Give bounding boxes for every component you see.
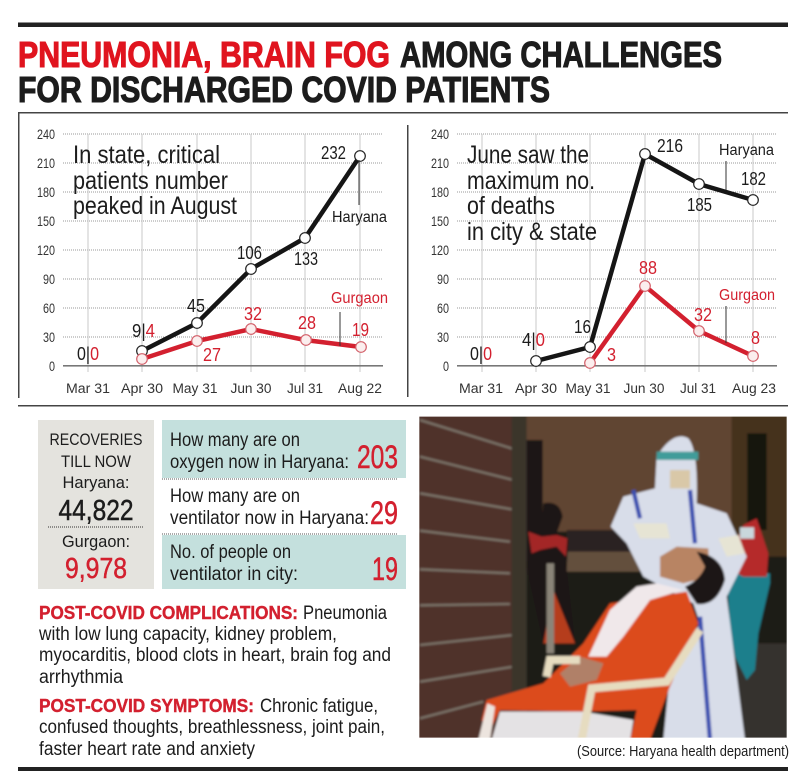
panel: recoveries: 44,822	[58, 495, 134, 527]
x axis labels: Jun 30	[624, 381, 664, 396]
text block: complications: POST-COVID COMPLICATIONS:	[39, 603, 298, 623]
value labels: 0|0	[77, 344, 99, 364]
y axis labels	[37, 127, 55, 374]
photo: bystander in red and black	[541, 502, 568, 572]
y axis labels: 90	[43, 272, 55, 287]
x axis labels: Mar 31	[66, 381, 110, 396]
value labels: 19	[352, 320, 369, 340]
y axis labels: 210	[431, 156, 449, 171]
value labels: 133	[294, 249, 318, 269]
markers	[531, 149, 758, 368]
value labels: 27	[203, 345, 221, 365]
title: FOR DISCHARGED COVID PATIENTS	[18, 69, 550, 110]
value labels: 0|0	[470, 344, 492, 364]
value labels: 106	[237, 243, 262, 263]
panel: ventilator in Haryana: ventilator now in Haryana:	[170, 508, 369, 529]
series label: Gurgaon: Gurgaon	[331, 290, 388, 307]
x axis labels: Apr 30	[121, 381, 163, 396]
panel: recoveries	[38, 420, 154, 589]
value labels: 4|0	[522, 330, 545, 350]
text block: complications: myocarditis, blood clots in heart, brain fog and	[39, 645, 391, 666]
chart heading: in city & state	[467, 218, 597, 246]
value labels: 9|4	[132, 321, 155, 341]
Gurgaon line	[590, 286, 753, 363]
y axis labels: 120	[431, 243, 449, 258]
y axis labels: 150	[431, 214, 449, 229]
y axis labels: 180	[37, 185, 55, 200]
title: AMONG CHALLENGES	[400, 34, 722, 75]
series label: Gurgaon	[719, 287, 775, 343]
chart heading	[73, 141, 237, 220]
value labels: 182	[741, 169, 766, 189]
Haryana line	[536, 154, 753, 361]
photo: seated woman	[482, 592, 698, 740]
panel: recoveries: Gurgaon:	[62, 532, 130, 551]
value labels	[470, 136, 766, 365]
panel: oxygen in Haryana	[162, 420, 406, 478]
panel: ventilator in city: 19	[372, 551, 398, 587]
photo: plastic chair	[547, 630, 700, 740]
y axis labels: 60	[43, 301, 55, 316]
y axis labels: 60	[437, 301, 449, 316]
value labels: 32	[694, 305, 712, 325]
photo: bystander in teal	[727, 573, 770, 680]
text block: symptoms: POST-COVID SYMPTOMS:	[39, 696, 254, 716]
series label: Gurgaon: Gurgaon	[719, 287, 775, 304]
chart: deaths	[431, 127, 777, 396]
value labels: 185	[687, 195, 712, 215]
value labels	[77, 143, 369, 365]
chart heading: of deaths	[467, 192, 555, 220]
y axis labels	[431, 127, 449, 374]
y axis labels: 240	[431, 127, 449, 142]
panel: ventilator in Haryana: 29	[370, 495, 398, 531]
chart heading: maximum no.	[467, 167, 595, 195]
y axis labels: 90	[437, 272, 449, 287]
value labels: 16	[574, 317, 591, 337]
value labels: 3	[607, 345, 616, 365]
x axis labels	[66, 381, 382, 396]
title: PNEUMONIA, BRAIN FOG	[18, 34, 390, 75]
y axis labels: 30	[437, 330, 449, 345]
panel: oxygen in Haryana: 203	[357, 439, 398, 475]
photo: health worker in PPE	[611, 436, 747, 740]
y axis labels: 150	[37, 214, 55, 229]
y axis labels: 240	[37, 127, 55, 142]
text block: complications: arrhythmia	[39, 667, 123, 688]
series label: Haryana: Haryana	[332, 209, 387, 226]
y axis labels: 120	[37, 243, 55, 258]
x axis labels: Jul 31	[287, 381, 323, 396]
x axis labels: Mar 31	[459, 381, 503, 396]
panel: ventilator in Haryana: How many are on	[170, 486, 300, 507]
panel: recoveries: TILL NOW	[61, 452, 131, 471]
photo: nasal swab test	[417, 413, 790, 742]
value labels: 232	[321, 143, 346, 163]
value labels: 32	[244, 304, 262, 324]
panel: ventilator in city: No. of people on	[170, 542, 291, 563]
chart heading: June saw the	[467, 141, 589, 169]
x axis labels	[459, 381, 776, 396]
x axis labels: May 31	[566, 381, 610, 396]
value labels: 88	[639, 258, 657, 278]
text block: complications: with low lung capacity, kidney problem,	[38, 624, 337, 645]
chart heading	[467, 141, 597, 246]
chart heading: In state, critical	[73, 141, 220, 169]
x axis labels: Aug 23	[732, 381, 776, 396]
panel: recoveries: RECOVERIES	[50, 430, 142, 449]
x axis labels: Aug 22	[338, 381, 382, 396]
chart: critical patients	[37, 127, 388, 396]
chart heading: patients number	[73, 167, 228, 195]
text block: symptoms: confused thoughts, breathlessness, joint pain,	[39, 717, 385, 738]
y axis labels: 30	[43, 330, 55, 345]
markers	[137, 151, 366, 364]
text block: complications	[38, 603, 391, 688]
Haryana line	[142, 156, 360, 351]
y axis labels: 0	[49, 359, 55, 374]
panel: oxygen in Haryana: oxygen now in Haryana:	[170, 452, 349, 473]
title	[18, 34, 722, 110]
panel: recoveries: Haryana:	[62, 473, 130, 492]
text block: symptoms	[39, 696, 385, 760]
x axis labels: Apr 30	[515, 381, 557, 396]
text block: symptoms: faster heart rate and anxiety	[39, 739, 255, 760]
panel: recoveries: 9,978	[65, 553, 127, 585]
chart heading: peaked in August	[73, 192, 237, 220]
panel: ventilator in city: ventilator in city:	[170, 564, 298, 585]
Gurgaon line	[142, 329, 361, 359]
text block: complications: Pneumonia	[303, 603, 387, 624]
value labels: 28	[298, 313, 316, 333]
panel: oxygen in Haryana: How many are on	[170, 430, 300, 451]
value labels: 8	[751, 328, 760, 348]
y axis labels: 180	[431, 185, 449, 200]
series label: Haryana	[332, 160, 387, 226]
text block: symptoms: Chronic fatigue,	[260, 696, 378, 717]
y axis labels: 0	[443, 359, 449, 374]
series label: Haryana: Haryana	[719, 142, 774, 159]
value labels: 45	[187, 296, 205, 316]
series label: Gurgaon	[331, 290, 388, 346]
series label: Haryana	[719, 142, 774, 190]
x axis labels: Jul 31	[680, 381, 716, 396]
x axis labels: May 31	[172, 381, 218, 396]
value labels: 216	[657, 136, 683, 156]
panel: ventilator in Haryana	[162, 480, 406, 533]
y axis labels: 210	[37, 156, 55, 171]
panel: ventilator in city	[162, 535, 406, 589]
x axis labels: Jun 30	[230, 381, 272, 396]
